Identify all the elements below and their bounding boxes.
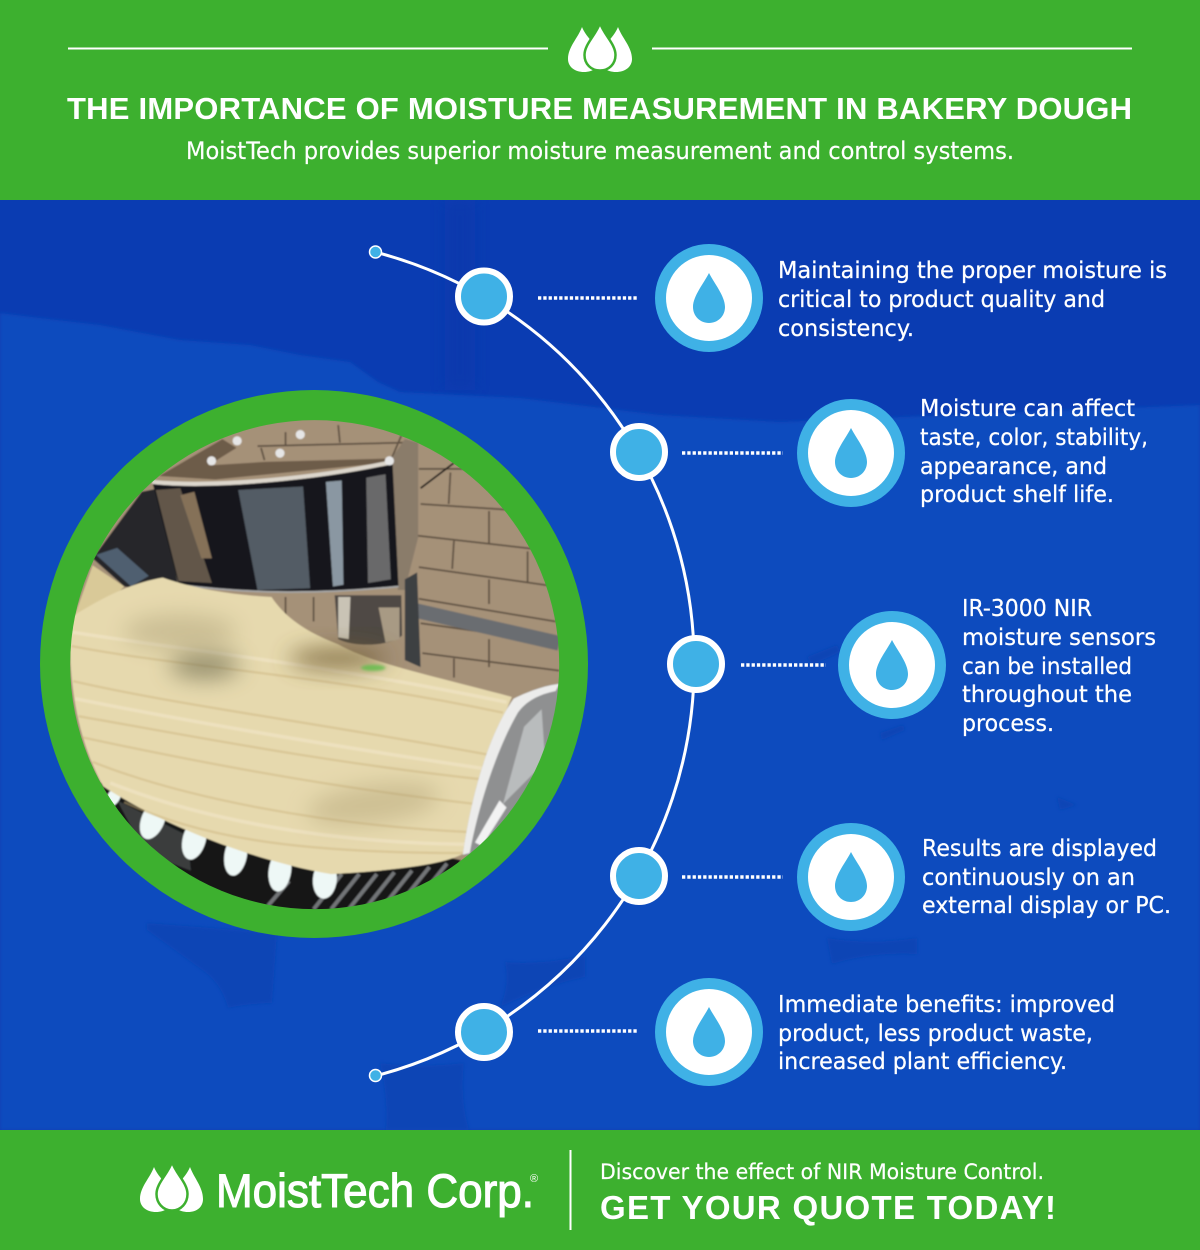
- metal ring at end of dough: [463, 683, 563, 857]
- bolts: [207, 430, 394, 465]
- text block: taste, color, stability,: [920, 425, 1148, 451]
- dotted connector: [538, 1029, 638, 1033]
- icon: drop badge: [838, 611, 946, 719]
- item 3: [741, 596, 1156, 737]
- icon: drop badge: [797, 399, 905, 507]
- divider: [570, 1150, 572, 1230]
- housing side: [393, 439, 418, 590]
- node 3: [670, 638, 722, 690]
- dotted connector: [741, 663, 826, 667]
- title: THE IMPORTANCE OF MOISTURE MEASUREMENT IN BAKERY DOUGH: [67, 91, 1132, 126]
- icon: drop badge: [797, 823, 905, 931]
- subtitle: MoistTech provides superior moisture measurement and control systems.: [186, 137, 1014, 165]
- header rule right: [652, 48, 1132, 50]
- dough creases: [72, 646, 503, 853]
- text block: appearance, and: [920, 454, 1107, 480]
- item 1: [538, 244, 1167, 352]
- icon: drop badge: [655, 978, 763, 1086]
- footer band: [0, 1130, 1200, 1250]
- logo wordmark: MoistTech Corp.: [216, 1164, 534, 1217]
- dotted connector: [682, 875, 783, 879]
- text block: process.: [962, 711, 1054, 737]
- item 4: [682, 823, 1171, 931]
- registered mark: ®: [530, 1173, 538, 1185]
- dotted connector: [538, 296, 638, 300]
- back dough fold: [75, 565, 124, 615]
- dotted connector: [682, 451, 783, 455]
- background: blue dough balls: [0, 200, 1200, 1130]
- header band: [0, 0, 1200, 200]
- white rollers: [103, 785, 338, 900]
- sensor rim: [152, 462, 393, 484]
- text block: [962, 596, 1156, 737]
- header rule left: [68, 48, 548, 50]
- text block: [922, 836, 1171, 919]
- pipe: [410, 609, 559, 643]
- text block: product shelf life.: [920, 482, 1114, 508]
- sensor chrome face: [152, 462, 399, 592]
- text block: [920, 396, 1148, 508]
- text block: increased plant efficiency.: [778, 1049, 1067, 1075]
- arc end dot bottom: [370, 1070, 382, 1082]
- icon: drop badge: [655, 244, 763, 352]
- item 2: [682, 396, 1148, 508]
- node 5: [458, 1006, 510, 1058]
- text block: throughout the: [962, 682, 1132, 708]
- text block: IR-3000 NIR: [962, 596, 1092, 622]
- node 2: [613, 426, 665, 478]
- text block: [778, 992, 1115, 1075]
- cable: [421, 463, 454, 488]
- icon: three water drops: [568, 23, 632, 72]
- photo of dough under sensor: [40, 390, 590, 940]
- icon: logo drops: [140, 1162, 203, 1212]
- brick wall: [70, 420, 560, 862]
- node 1: [458, 270, 510, 322]
- item 5: [538, 978, 1115, 1086]
- text block: Results are displayed: [922, 836, 1157, 862]
- text block: moisture sensors: [962, 625, 1156, 651]
- dough sheet: [70, 578, 512, 874]
- text block: Immediate benefits: improved: [778, 992, 1115, 1018]
- arc timeline: [370, 246, 722, 1082]
- node 4: [613, 850, 665, 902]
- text block: [778, 258, 1167, 342]
- text block: Moisture can affect: [920, 396, 1135, 422]
- text block: critical to product quality and: [778, 287, 1105, 313]
- text block: product, less product waste,: [778, 1021, 1093, 1047]
- text block: external display or PC.: [922, 893, 1171, 919]
- text block: continuously on an: [922, 865, 1135, 891]
- call to action: GET YOUR QUOTE TODAY!: [600, 1189, 1056, 1226]
- text block: consistency.: [778, 316, 914, 342]
- text block: Maintaining the proper moisture is: [778, 258, 1167, 284]
- lower dark conveyor: [100, 783, 461, 916]
- green ring: [40, 390, 588, 938]
- dark machine left: [94, 488, 178, 588]
- arc end dot top: [370, 246, 382, 258]
- arc line: [375, 252, 694, 1076]
- lower chrome sensor cylinder: [335, 595, 402, 645]
- footer tagline: Discover the effect of NIR Moisture Control.: [600, 1160, 1044, 1184]
- housing top reflection: [159, 439, 394, 479]
- sensor shadow on dough: [289, 648, 387, 669]
- text block: can be installed: [962, 654, 1132, 680]
